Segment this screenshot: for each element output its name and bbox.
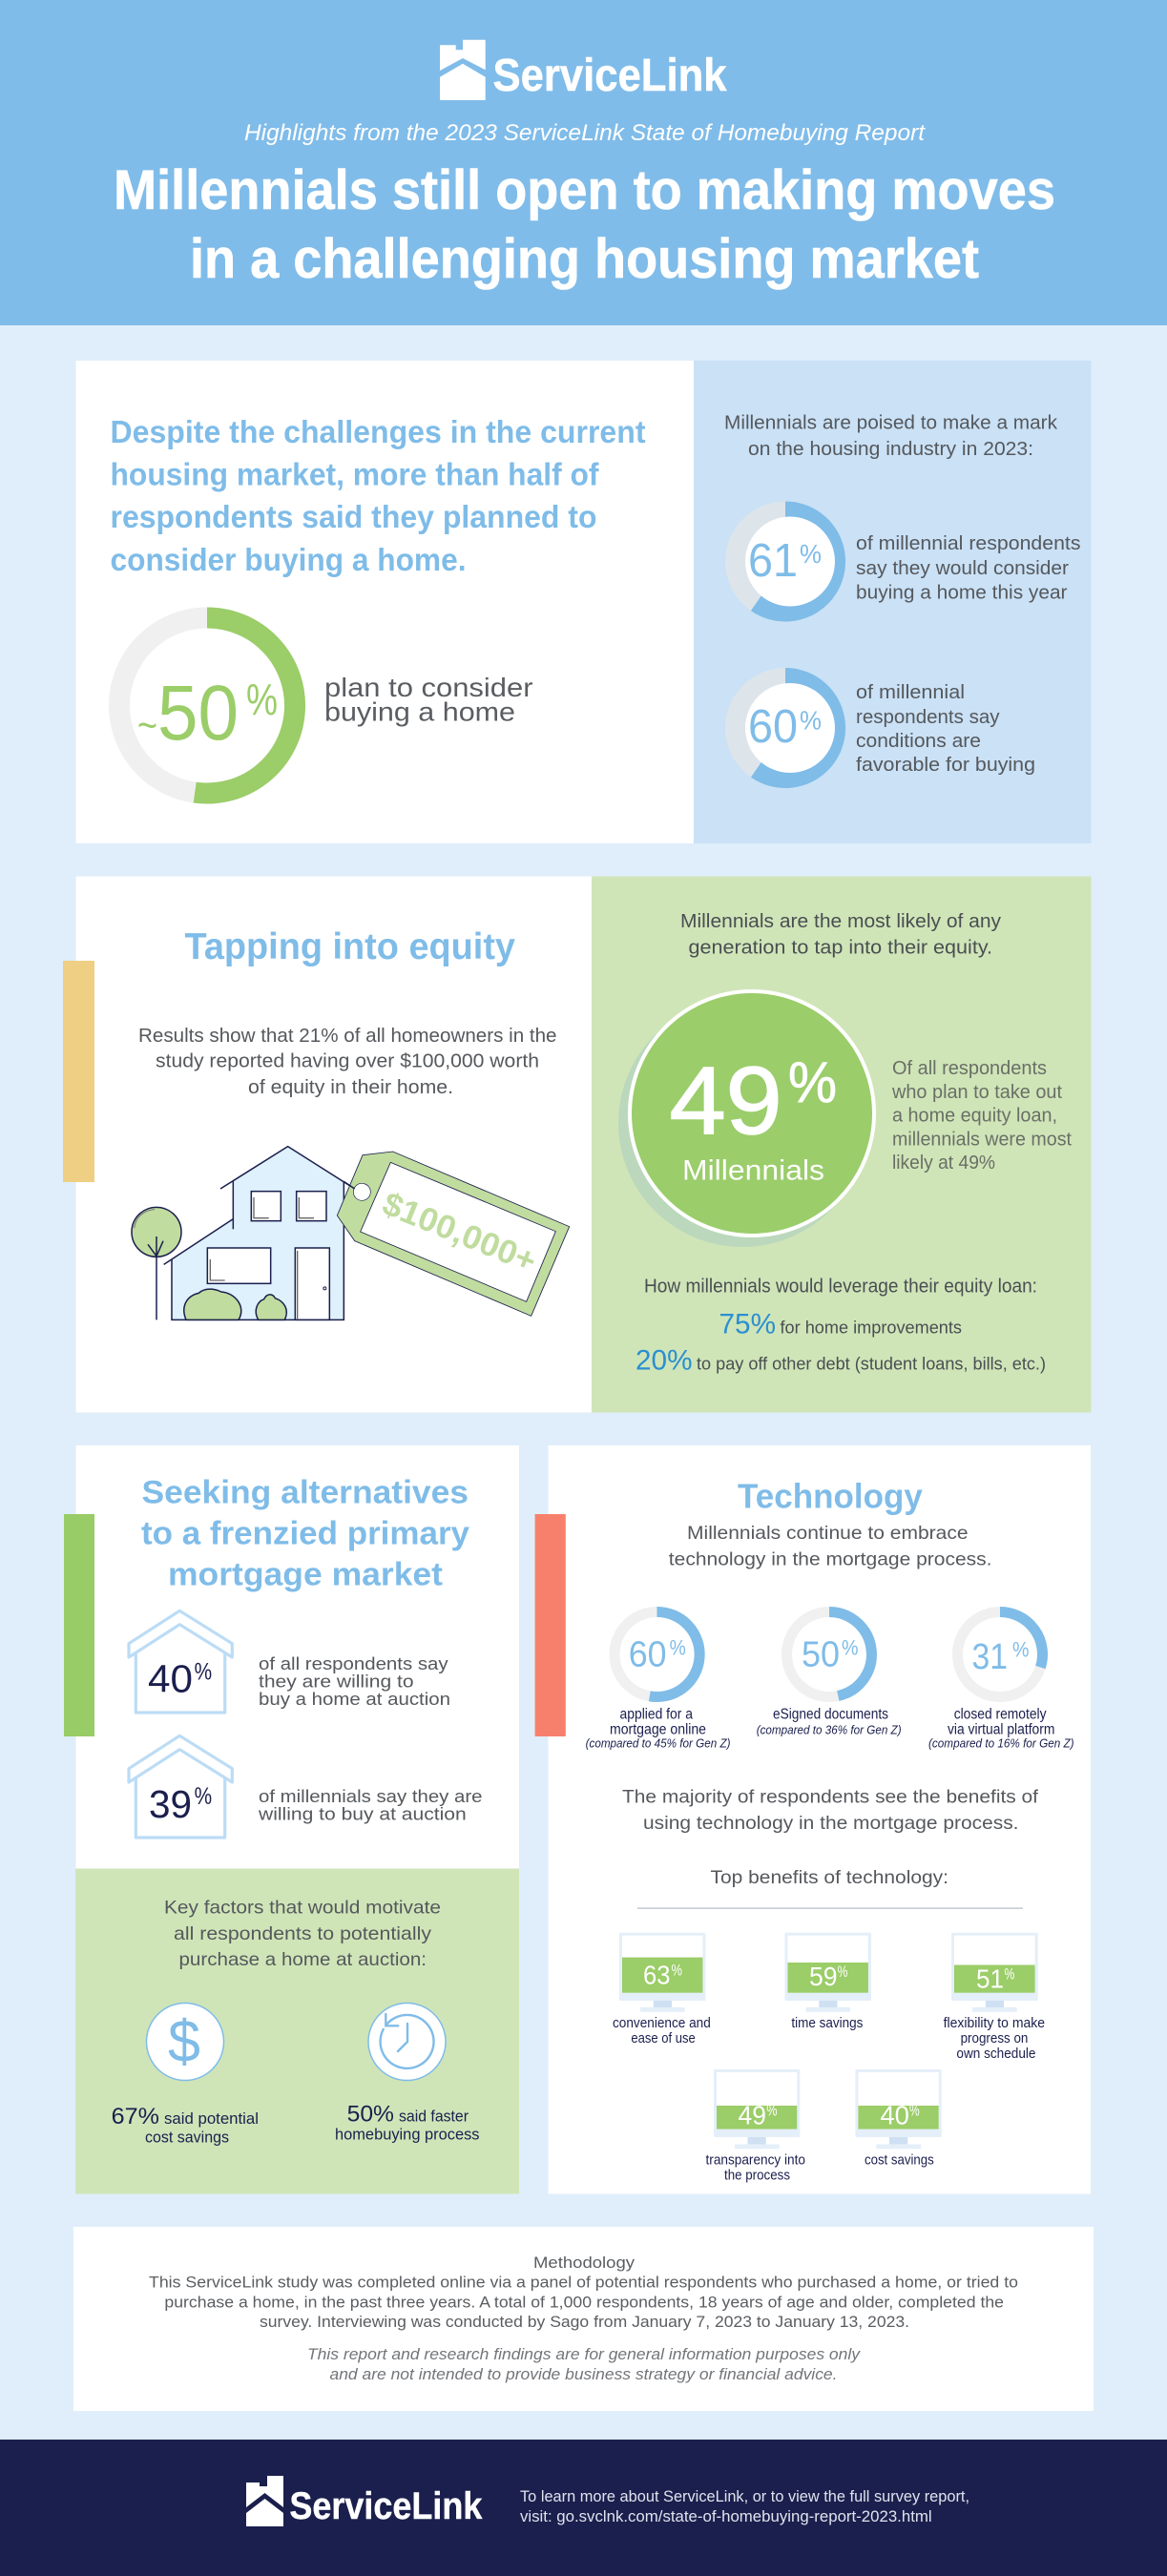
stat: 50%: 50% — [347, 2102, 394, 2128]
donut: 61% — [725, 502, 845, 622]
monitor: 63% — [619, 1933, 706, 2012]
illustration: house with price tag: $100,000+ — [377, 1186, 541, 1280]
text: 40%: they are willing to — [259, 1672, 414, 1691]
monitor: 40%: % — [909, 2101, 920, 2119]
side note: millennials were most — [892, 1130, 1072, 1151]
majority text: The majority of respondents see the benefits of — [622, 1787, 1039, 1808]
side note — [891, 1058, 1072, 1174]
heading: seeking alternatives: Seeking alternatives — [141, 1475, 469, 1511]
intro text — [724, 412, 1058, 460]
house icon: 40%: % — [195, 1658, 212, 1685]
title: Millennials still open to making moves — [114, 159, 1055, 221]
methodology text: This ServiceLink study was completed online via a panel of potential respondents who purchased a home, or tried to — [149, 2274, 1018, 2292]
intro text: Millennials are poised to make a mark — [724, 412, 1058, 433]
text: 61%: of millennial respondents — [856, 533, 1080, 554]
footer logo — [246, 2476, 483, 2527]
methodology text: purchase a home, in the past three years. A total of 1,000 respondents, 18 years of age and older, completed the — [164, 2293, 1004, 2311]
monitor: 49%: % — [766, 2101, 777, 2119]
heading: seeking alternatives: mortgage market — [168, 1557, 443, 1593]
caption: closed remotely: via virtual platform — [948, 1722, 1054, 1738]
caption: closed remotely: (compared to 16% for Gen Z) — [928, 1735, 1074, 1750]
monitor: 63%: 63 — [643, 1961, 670, 1990]
footer text: visit: go.svclnk.com/state-of-homebuying-report-2023.html — [520, 2507, 932, 2525]
stat: 50%: homebuying process — [335, 2127, 479, 2144]
caption: applied online: mortgage online — [610, 1722, 706, 1738]
text: 61%: buying a home this year — [856, 582, 1068, 603]
monitor: 49% — [714, 2069, 800, 2149]
caption: applied online: (compared to 45% for Gen Z) — [586, 1735, 731, 1750]
donut: 50% eSigned — [786, 1612, 872, 1696]
technology intro — [669, 1523, 992, 1569]
house icon: 39% — [129, 1735, 232, 1838]
monitor: 59%: 59 — [809, 1962, 838, 1991]
footer text — [520, 2487, 969, 2525]
equity text — [138, 1026, 557, 1098]
text: 39%: willing to buy at auction — [258, 1805, 467, 1824]
caption: flexibility — [944, 2015, 1045, 2062]
caption: transparency — [706, 2152, 805, 2183]
donut: 61%: % — [800, 539, 822, 569]
text: 60% — [856, 682, 1035, 776]
stat: 50% — [335, 2102, 479, 2144]
logo: ServiceLink — [440, 40, 727, 101]
monitor: 40% — [855, 2069, 942, 2149]
caption: eSigned: eSigned documents — [773, 1707, 888, 1723]
disclaimer — [307, 2345, 862, 2383]
monitor: 51% — [951, 1933, 1038, 2012]
donut chart: ~50%: 50 — [157, 670, 239, 757]
caption: eSigned — [757, 1707, 902, 1737]
donut: 50% eSigned: 50 — [802, 1635, 840, 1675]
intro text: on the housing industry in 2023: — [748, 439, 1033, 460]
donut caption: buying a home — [324, 696, 515, 727]
accent bar: coral — [535, 1514, 566, 1736]
stat: 67%: cost savings — [145, 2129, 229, 2146]
side note: likely at 49% — [892, 1153, 995, 1174]
big stat circle: 49%: Millennials — [682, 1155, 824, 1187]
heading: despite the challenges: Despite the challenges in the current — [111, 414, 645, 449]
caption: closed remotely — [928, 1707, 1074, 1750]
caption: cost savings: cost savings — [865, 2152, 934, 2169]
panel: tapping into equity — [63, 876, 592, 1412]
donut: 60%: % — [800, 706, 822, 735]
caption: flexibility: own schedule — [956, 2046, 1036, 2062]
stat: 67% — [112, 2104, 259, 2146]
caption: applied online — [586, 1707, 731, 1750]
donut: 61%: 61 — [748, 535, 798, 587]
monitor: 59% — [784, 1933, 871, 2012]
donut: 31% closed remotely: 31 — [971, 1637, 1008, 1677]
technology intro: technology in the mortgage process. — [669, 1548, 992, 1569]
big stat circle: 49%: % — [788, 1050, 837, 1114]
caption: transparency: the process — [724, 2168, 790, 2183]
donut caption — [324, 673, 532, 727]
subheading: top benefits: Top benefits of technology: — [710, 1867, 948, 1888]
caption: applied online: applied for a — [620, 1707, 693, 1723]
caption: closed remotely: closed remotely — [954, 1707, 1047, 1723]
title: in a challenging housing market — [190, 228, 979, 290]
monitor: 40%: 40 — [880, 2100, 909, 2129]
monitor: 49%: 49 — [739, 2100, 766, 2129]
intro text — [680, 911, 1001, 959]
side note: who plan to take out — [891, 1082, 1062, 1103]
icon: dollar — [147, 2004, 223, 2080]
key factors text: purchase a home at auction: — [179, 1949, 427, 1970]
footer text: To learn more about ServiceLink, or to view the full survey report, — [520, 2487, 969, 2505]
illustration: house with price tag — [132, 1147, 570, 1319]
subtitle: Highlights from the 2023 ServiceLink State of Homebuying Report — [244, 120, 926, 146]
panel: millennials poised — [694, 361, 1092, 843]
intro text: generation to tap into their equity. — [689, 938, 992, 959]
heading: tapping into equity: Tapping into equity — [185, 926, 515, 967]
loan uses heading: How millennials would leverage their equity loan: — [644, 1277, 1037, 1298]
text: 60%: conditions are — [856, 731, 981, 752]
stat: 20% — [636, 1344, 1046, 1376]
heading: despite the challenges: housing market, more than half of — [111, 456, 599, 492]
donut: 60% applied online: 60 — [629, 1635, 666, 1675]
side note: a home equity loan, — [892, 1106, 1057, 1127]
donut: 31% closed remotely: % — [1012, 1637, 1029, 1662]
caption: flexibility: flexibility to make — [944, 2015, 1045, 2031]
logo: ServiceLink: ServiceLink — [492, 51, 727, 101]
icon: dollar: $ — [168, 2009, 200, 2075]
majority text — [622, 1787, 1039, 1834]
text: 40%: of all respondents say — [259, 1654, 448, 1673]
equity text: study reported having over $100,000 worth — [156, 1051, 539, 1072]
disclaimer: This report and research findings are for general information purposes only — [307, 2345, 862, 2363]
heading: despite the challenges: consider buying a home. — [111, 542, 466, 577]
house icon: 39%: % — [195, 1783, 212, 1810]
technology intro: Millennials continue to embrace — [687, 1523, 969, 1544]
donut: 50% eSigned: % — [842, 1635, 859, 1660]
text: 60%: of millennial — [856, 682, 965, 703]
monitor: 63%: % — [672, 1962, 682, 1980]
donut caption: plan to consider — [324, 673, 532, 702]
donut: 60% applied online — [615, 1611, 699, 1696]
accent bar: yellow — [63, 961, 94, 1182]
stat: 20%: to pay off other debt (student loans, bills, etc.) — [697, 1354, 1046, 1373]
text: 40%: buy a home at auction — [259, 1690, 450, 1709]
header banner — [0, 0, 1167, 325]
caption: convenience: convenience and — [613, 2015, 711, 2031]
panel: millennials equity — [592, 876, 1092, 1412]
stat: 20%: 20% — [636, 1344, 693, 1376]
disclaimer: and are not intended to provide business strategy or financial advice. — [330, 2365, 838, 2383]
donut chart: ~50% — [119, 618, 295, 794]
stat: 50%: said faster — [399, 2109, 469, 2126]
key factors text — [164, 1898, 441, 1970]
text: 61% — [856, 533, 1080, 603]
big stat circle: 49%: 49 — [670, 1048, 782, 1154]
caption: transparency: transparency into — [706, 2152, 805, 2169]
key factors text: Key factors that would motivate — [164, 1898, 441, 1919]
panel: key factors — [75, 1868, 519, 2194]
equity text: of equity in their home. — [248, 1077, 453, 1098]
house icon: 39%: 39 — [149, 1782, 192, 1826]
donut: 31% closed remotely — [958, 1612, 1043, 1696]
caption: convenience: ease of use — [631, 2030, 696, 2046]
methodology text — [149, 2254, 1018, 2331]
title — [114, 159, 1055, 290]
text: 39% — [258, 1787, 483, 1824]
text: 40% — [259, 1654, 450, 1709]
panel: seeking alternatives — [64, 1445, 519, 1869]
panel: plans to buy — [76, 361, 695, 843]
equity text: Results show that 21% of all homeowners in the — [138, 1026, 557, 1047]
panel: methodology — [73, 2227, 1094, 2411]
stat: 67%: said potential — [164, 2110, 259, 2128]
heading: despite the challenges: respondents said they planned to — [111, 499, 597, 534]
donut: 60%: 60 — [748, 701, 798, 753]
intro text: Millennials are the most likely of any — [680, 911, 1001, 932]
text: 60%: respondents say — [856, 707, 1000, 728]
donut chart: ~50%: ~ — [137, 702, 157, 749]
methodology text: survey. Interviewing was conducted by Sago from January 7, 2023 to January 13, 2023. — [260, 2313, 909, 2331]
footer logo: ServiceLink — [289, 2485, 483, 2527]
side note: Of all respondents — [892, 1058, 1047, 1079]
key factors text: all respondents to potentially — [174, 1923, 431, 1944]
heading: despite the challenges — [111, 414, 645, 577]
donut: 60% applied online: % — [670, 1635, 686, 1660]
big stat circle: 49% — [618, 991, 874, 1247]
text: 39%: of millennials say they are — [259, 1787, 483, 1806]
text: 61%: say they would consider — [856, 558, 1069, 579]
footer — [0, 2440, 1167, 2576]
caption: time savings: time savings — [791, 2015, 863, 2031]
caption: eSigned: (compared to 36% for Gen Z) — [757, 1723, 902, 1737]
stat: 75%: for home improvements — [781, 1318, 962, 1337]
donut chart: ~50%: % — [246, 675, 278, 724]
majority text: using technology in the mortgage process. — [643, 1813, 1019, 1834]
monitor: 59%: % — [838, 1963, 847, 1981]
house icon: 40%: 40 — [148, 1657, 193, 1701]
methodology text: Methodology — [533, 2254, 636, 2272]
stat: 75% — [719, 1308, 962, 1340]
heading: seeking alternatives: to a frenzied primary — [141, 1516, 469, 1552]
heading: seeking alternatives — [141, 1475, 469, 1593]
stat: 75%: 75% — [719, 1308, 776, 1340]
caption: convenience — [613, 2015, 711, 2046]
heading: technology: Technology — [738, 1477, 923, 1515]
icon: clock — [368, 2004, 446, 2080]
stat: 67%: 67% — [112, 2104, 159, 2129]
text: 60%: favorable for buying — [856, 755, 1035, 776]
donut: 60% — [725, 668, 845, 788]
monitor: 51%: % — [1004, 1964, 1014, 1983]
panel: technology — [535, 1445, 1091, 2194]
monitor: 51%: 51 — [976, 1963, 1004, 1993]
accent bar: green — [64, 1514, 94, 1736]
caption: flexibility: progress on — [961, 2030, 1028, 2046]
house icon: 40% — [129, 1610, 232, 1713]
